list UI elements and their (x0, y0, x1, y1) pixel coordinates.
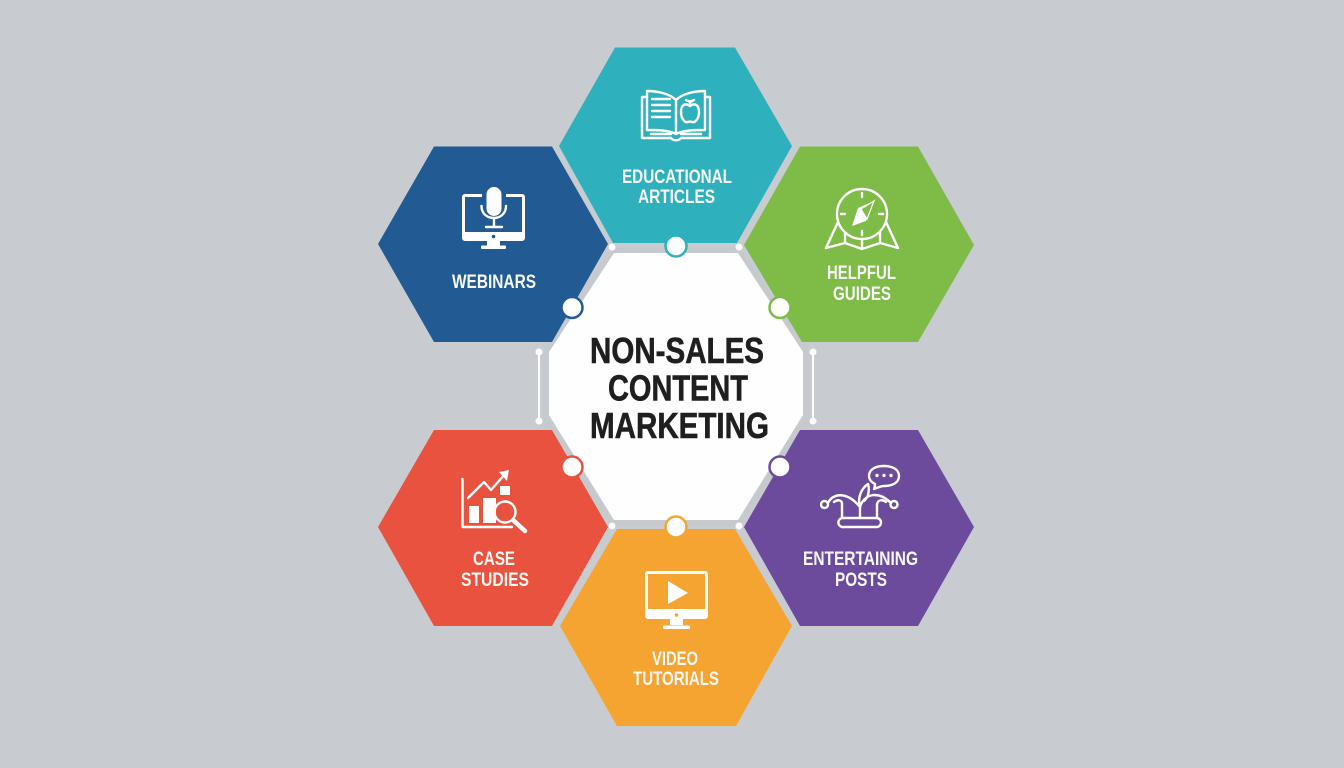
label: helpful guides (827, 262, 896, 305)
icon: monitor with microphone (462, 187, 525, 249)
connector node: blue (562, 297, 582, 318)
small junction dots (608, 244, 742, 530)
label: educational articles: EDUCATIONAL (622, 166, 732, 188)
label: video tutorials: TUTORIALS (633, 668, 719, 690)
icon: compass on map (826, 189, 898, 249)
center octagon: non-sales content marketing (549, 253, 803, 520)
label: entertaining posts: POSTS (835, 569, 887, 591)
panel: webinars (378, 146, 608, 342)
right connector line (810, 348, 816, 424)
label: helpful guides: HELPFUL (827, 262, 896, 284)
connector node: orange (666, 516, 686, 538)
label: helpful guides: GUIDES (833, 283, 891, 305)
connector node: teal (666, 236, 686, 256)
title: NON-SALES (590, 330, 764, 371)
left connector line (536, 348, 542, 424)
panel: case studies (378, 430, 608, 626)
title (590, 330, 769, 446)
label: educational articles: ARTICLES (638, 186, 715, 208)
label: entertaining posts: ENTERTAINING (803, 548, 918, 570)
panel: educational articles (559, 48, 792, 243)
icon: monitor with play button (645, 571, 708, 629)
label: case studies (461, 548, 529, 591)
icon: jester hat with speech bubble (821, 466, 899, 527)
label: case studies: CASE (473, 548, 515, 570)
panel: video tutorials (560, 529, 792, 726)
label: video tutorials (633, 648, 719, 690)
connector node: green (770, 297, 790, 318)
icon: chart with magnifier (462, 470, 525, 531)
title: MARKETING (590, 405, 769, 446)
label: case studies: STUDIES (461, 569, 529, 591)
title: CONTENT (608, 368, 748, 408)
label: educational articles (622, 166, 732, 208)
icon: book with apple (642, 91, 710, 140)
connector node: red (562, 456, 582, 478)
label: webinars: WEBINARS (452, 271, 536, 293)
connector node: purple (770, 456, 790, 478)
label: entertaining posts (803, 548, 918, 591)
label: video tutorials: VIDEO (652, 648, 698, 670)
center band behind the hexagons (539, 247, 813, 526)
panel: entertaining posts (744, 430, 974, 626)
panel: helpful guides (744, 146, 974, 342)
